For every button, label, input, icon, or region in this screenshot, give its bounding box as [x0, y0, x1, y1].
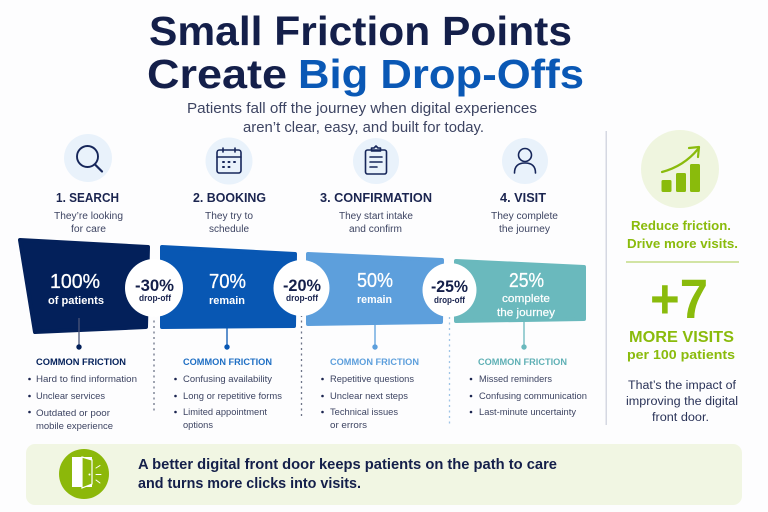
connector 2: [224, 318, 230, 350]
drop-off badge 25%: [422, 263, 476, 317]
funnel stage 4: [456, 261, 584, 321]
funnel stage 4: complete: [502, 293, 550, 305]
icon: clipboard: [353, 138, 399, 184]
title: Big Drop-Offs: [298, 51, 584, 97]
friction list 3: COMMON FRICTION: [330, 357, 419, 368]
drop-off badge 20%: [274, 260, 330, 316]
drop-off badge 30%: [125, 259, 183, 317]
drop-off badge 25%: -25%: [431, 277, 468, 296]
subtitle: [187, 100, 537, 136]
dotted separators: [154, 315, 450, 424]
friction list 4: COMMON FRICTION: [478, 357, 567, 368]
friction list 4: Confusing communication: [479, 391, 587, 402]
funnel stage 2: remain: [209, 295, 245, 307]
step 3 heading: They start intake: [339, 211, 413, 222]
drop-off badge 20%: drop-off: [286, 293, 319, 303]
friction list 4: Missed reminders: [479, 374, 552, 385]
banner: [26, 444, 742, 505]
banner message: and turns more clicks into visits.: [138, 475, 361, 492]
connector 4: [521, 322, 527, 350]
step 1 heading: 1. SEARCH: [56, 191, 119, 205]
step 2 heading: [193, 191, 266, 235]
funnel stage 1: 100%: [50, 271, 100, 293]
friction list 4: [470, 357, 587, 418]
icon: calendar: [206, 138, 252, 184]
friction list 3: [321, 357, 419, 431]
panel: impact: [606, 130, 739, 425]
friction list 2: COMMON FRICTION: [183, 357, 272, 368]
step 2 heading: 2. BOOKING: [193, 191, 266, 205]
funnel stage 3: remain: [357, 294, 392, 306]
icon: door: [59, 449, 109, 499]
tagline: Reduce friction.: [631, 218, 731, 233]
step 3 heading: 3. CONFIRMATION: [320, 191, 432, 205]
friction list 3: Unclear next steps: [330, 391, 408, 402]
impact note: [626, 380, 738, 424]
funnel stage 4: 25%: [509, 270, 544, 292]
friction list 2: Long or repetitive forms: [183, 391, 282, 402]
subtitle: Patients fall off the journey when digital experiences: [187, 100, 537, 117]
connector 3: [372, 325, 378, 350]
banner message: [138, 456, 557, 492]
friction list 2: [174, 357, 282, 431]
impact note: That’s the impact of: [628, 380, 737, 392]
more visits label: [627, 329, 735, 362]
tagline: Drive more visits.: [627, 236, 738, 251]
icon: search: [64, 134, 112, 182]
funnel stage 3: [308, 254, 442, 324]
subtitle: aren’t clear, easy, and built for today.: [243, 119, 484, 136]
banner message: A better digital front door keeps patients on the path to care: [138, 456, 557, 473]
icon: person: [502, 138, 548, 184]
friction list 2: Limited appointment: [183, 407, 267, 418]
step 1 heading: for care: [71, 224, 106, 235]
friction list 1: Outdated or poor: [36, 408, 110, 419]
drop-off badge 25%: drop-off: [434, 295, 466, 305]
more visits label: per 100 patients: [627, 347, 735, 362]
funnel stage 4: the journey: [497, 307, 556, 319]
step 1 heading: They’re looking: [54, 211, 123, 222]
drop-off badge 30%: -30%: [135, 276, 174, 295]
step 3 heading: and confirm: [349, 224, 402, 235]
impact note: front door.: [652, 412, 709, 424]
step 3 heading: [320, 191, 432, 235]
step 2 heading: schedule: [209, 224, 249, 235]
friction list 1: Hard to find information: [36, 374, 137, 385]
friction list 1: mobile experience: [36, 421, 113, 432]
funnel stage 2: 70%: [209, 271, 246, 293]
title: Create: [147, 51, 287, 97]
impact note: improving the digital: [626, 396, 738, 408]
friction list 1: [28, 357, 137, 432]
funnel stage 3: 50%: [357, 270, 393, 292]
friction list 4: Last-minute uncertainty: [479, 407, 576, 418]
funnel stage 2: [162, 247, 295, 327]
drop-off badge 30%: drop-off: [139, 293, 172, 303]
connector 1: [76, 318, 82, 350]
friction list 3: Repetitive questions: [330, 374, 414, 385]
step 4 heading: They complete: [491, 211, 558, 222]
step 4 heading: the journey: [499, 224, 550, 235]
friction list 2: Confusing availability: [183, 374, 272, 385]
step 1 heading: [54, 191, 123, 235]
funnel stage 1: of patients: [48, 295, 104, 307]
step 4 heading: 4. VISIT: [500, 191, 546, 205]
drop-off badge 20%: -20%: [283, 276, 321, 295]
friction list 1: COMMON FRICTION: [36, 357, 126, 368]
friction list 1: Unclear services: [36, 391, 105, 402]
step 2 heading: They try to: [205, 211, 253, 222]
friction list 2: options: [183, 420, 213, 431]
icon: growth chart: [641, 130, 719, 208]
tagline: [627, 218, 738, 251]
funnel stage 1: [20, 240, 148, 332]
title: [147, 8, 584, 97]
friction list 3: or errors: [330, 420, 367, 431]
more visits label: MORE VISITS: [629, 329, 734, 346]
big number: +7: [650, 267, 708, 330]
friction list 3: Technical issues: [330, 407, 398, 418]
step 4 heading: [491, 191, 558, 235]
title: Small Friction Points: [149, 8, 572, 54]
